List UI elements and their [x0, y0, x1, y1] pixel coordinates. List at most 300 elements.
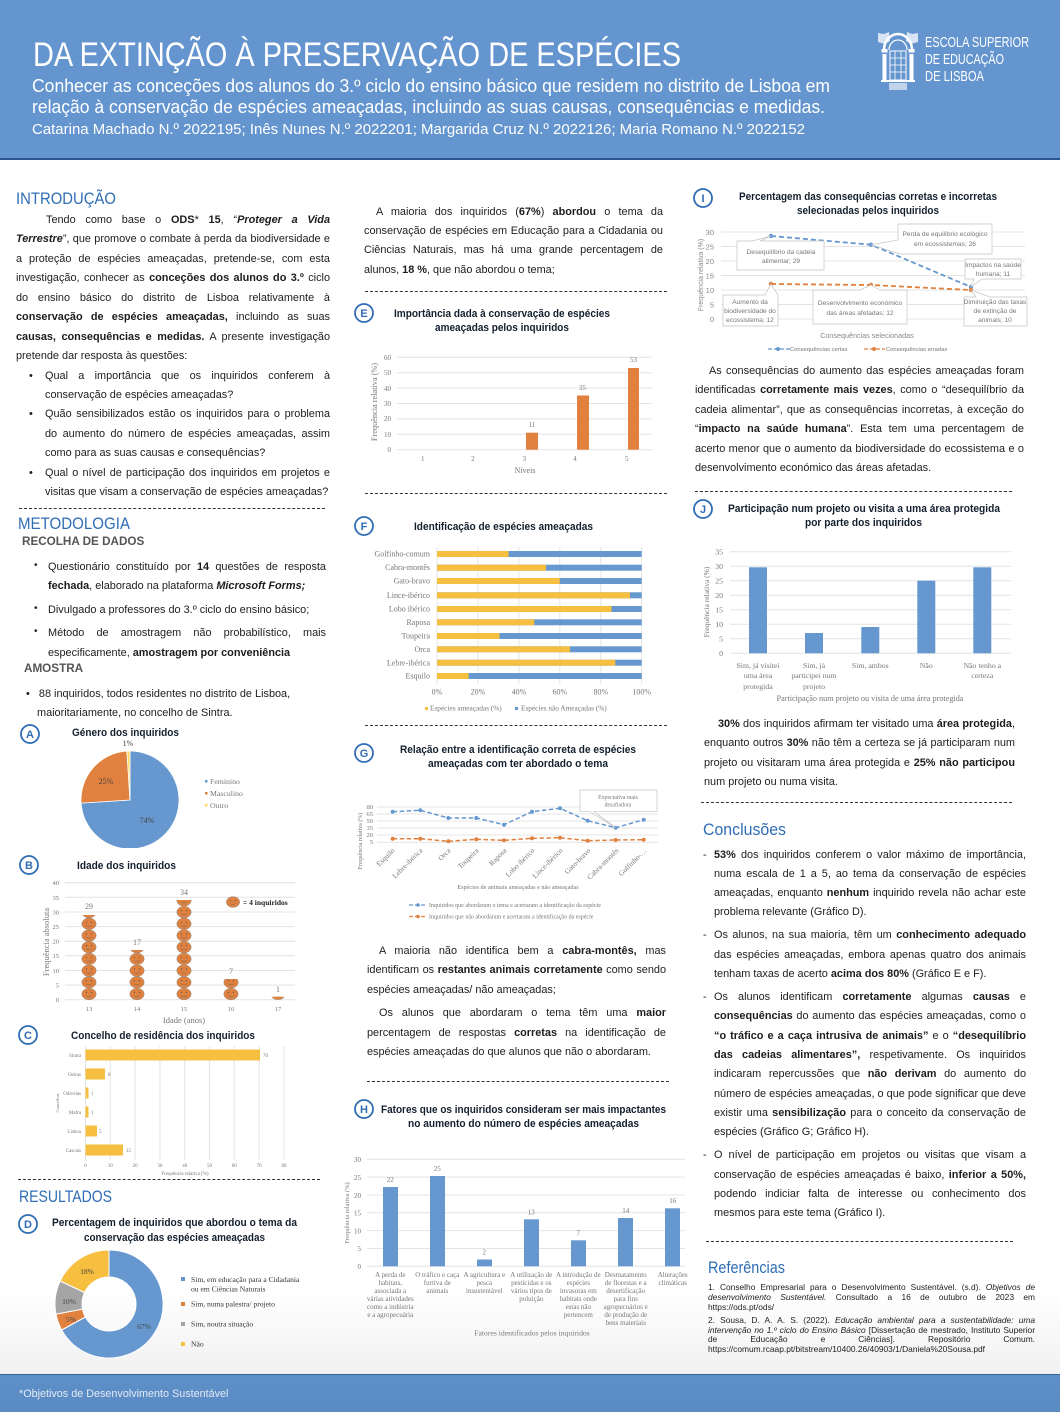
bar chart: participação: Sim, já visitei [736, 661, 780, 670]
pictogram chart: idade: 40 [52, 880, 59, 887]
legend: género: Feminino [210, 777, 240, 786]
bar chart: importância: 50 [384, 369, 392, 377]
pictogram chart: idade: 0 [56, 997, 59, 1004]
pictogram chart: idade: 15 [181, 1006, 187, 1013]
bar chart: concelho: Sintra [69, 1054, 82, 1059]
list: conclusões: espécies (Gráfico G; Gráfico H). [714, 1126, 869, 1138]
text: consequências [695, 365, 1024, 474]
panel: C concelho [18, 1025, 287, 1177]
list: conclusões: podendo indiciar falta de interesse ou conhecimento dos [714, 1188, 1026, 1200]
line chart: Espécies de animais ameaçadas e não ameaçadas [457, 884, 579, 891]
badge D [19, 1215, 37, 1233]
header banner [0, 0, 1060, 160]
bar chart: fatores: A introdução de [556, 1271, 601, 1279]
legend: consequências [768, 347, 947, 353]
bar chart: participação: Participação num projeto ou visita de uma área protegida [777, 694, 964, 703]
text: participação [704, 718, 1015, 788]
heading: referências: Referências [708, 1258, 785, 1277]
text: identificação de espécies: espécies ameaçadas do que alunos que não o abordaram. [367, 1046, 651, 1058]
icon: school logo window [878, 32, 918, 90]
text: introdução: conservação de espécies ameaçadas? [45, 389, 233, 401]
pictogram chart: idade: 16 [228, 1006, 235, 1013]
pictogram chart: idade: 7 [229, 967, 233, 976]
legend: donut [181, 1275, 300, 1348]
bar chart: concelho: Mafra [69, 1111, 82, 1116]
bar chart: fatores: pertencem [564, 1311, 593, 1319]
list: conclusões: “o tráfico e a caça intrusiva de animais” e o “desequilíbrio [714, 1030, 1026, 1042]
bar chart: importância: 2 [471, 455, 475, 463]
callout: expectativa: Expectativa mais [598, 795, 639, 801]
bar chart: importância: 11 [529, 421, 536, 429]
list: conclusões: - [703, 929, 707, 941]
bar chart: participação: Não tenho a [963, 661, 1002, 670]
text: consequências: desenvolvimento económico das áreas afetadas. [695, 462, 931, 474]
text: introdução: Qual o nível de participação dos inquiridos em projetos e [45, 467, 330, 479]
bar chart: participação: Sim, ambos [852, 661, 889, 670]
line chart: Lince-ibérico [530, 846, 565, 880]
bar chart: fatores: 13 [528, 1208, 535, 1216]
text: identificação de espécies [367, 945, 666, 1058]
authors: Catarina Machado N.º 2022195; Inês Nunes N.º 2022201; Margarida Cruz N.º 2022126; Maria Romano N.º 2022152 [32, 121, 805, 138]
pictogram chart: idade: 10 [52, 968, 59, 975]
bar chart: fatores: pesticidas e os [511, 1279, 552, 1287]
bar chart: fatores: e a agropecuária [367, 1311, 414, 1319]
line chart: 80 [366, 804, 373, 811]
callout labels: animais; 10 [978, 317, 1012, 324]
text: amostra [26, 688, 290, 719]
badge I [694, 189, 712, 207]
line chart: Gato-bravo [563, 846, 593, 876]
line chart: 50 [366, 818, 373, 825]
text: referências: intervenção no 1.º ciclo do Ensino Básico [Dissertação de mestrado, Instituto Superior [708, 1325, 1035, 1335]
panel: B idade [19, 855, 295, 1025]
line chart: 65 [366, 811, 373, 818]
bar chart: fatores: 22 [387, 1176, 394, 1184]
badge G [355, 744, 373, 762]
list: conclusões: conservação de espécies ameaçadas é baixo, inferior a 50%, [714, 1169, 1026, 1181]
bar chart: participação: Não [920, 661, 933, 670]
bar chart: fatores: insustentável [466, 1287, 503, 1295]
heading D [52, 1217, 298, 1244]
callout labels: alimentar; 29 [762, 258, 800, 265]
bar chart: fatores: várias atividades [367, 1295, 414, 1303]
text: referências [708, 1282, 1035, 1354]
bar chart: concelho: Oeiras [68, 1073, 81, 1078]
bar chart: concelho: 15 [126, 1149, 132, 1154]
bar chart: participação: protegida [743, 682, 773, 691]
bar chart: fatores: 30 [354, 1156, 362, 1164]
bar chart: participação: 25 [715, 576, 723, 586]
heading G: Relação entre a identificação correta de espécies [400, 744, 636, 756]
callout labels: Desenvolvimento económico [818, 300, 902, 307]
bar chart: concelho: 10 [108, 1164, 113, 1169]
stacked bar chart [374, 547, 651, 696]
heading G [400, 744, 636, 770]
line chart: Cabra-montês [585, 846, 621, 881]
callout labels: em ecossistemas; 26 [914, 241, 976, 248]
pie chart: género [81, 739, 179, 849]
stacked bar chart: Golfinho-comum [374, 550, 431, 558]
bar chart: importância: 35 [579, 384, 586, 392]
bar chart: fatores: A perda de [375, 1271, 405, 1279]
heading: conclusões: Conclusões [703, 820, 786, 839]
pictogram chart: idade: 14 [134, 1006, 141, 1013]
pictogram chart: idade: 15 [52, 953, 59, 960]
legend: line chart: Inquiridos que não abordaram e acertaram a identificação da espécie [429, 914, 594, 920]
bar chart: concelho: Cascais [66, 1149, 81, 1154]
bar chart: fatores: furtiva de [424, 1279, 451, 1287]
bar chart: fatores: de produção de [604, 1311, 647, 1319]
callout labels: das áreas afetadas; 12 [826, 310, 894, 317]
heading D: conservação das espécies ameaçadas [84, 1232, 265, 1244]
text: participação: projeto ou visitaram uma área protegida e 25% não participou [704, 757, 1015, 769]
heading J: por parte dos inquiridos [805, 517, 922, 529]
bar chart: fatores: Alterações [658, 1271, 688, 1279]
stacked bar chart: 20% [471, 688, 486, 696]
text: amostra: • 88 inquiridos, todos residentes no distrito de Lisboa, [26, 688, 290, 700]
bar chart: concelho: Frequência relativa (%) [161, 1172, 209, 1177]
bar chart: fatores: agropecuários e [604, 1303, 648, 1311]
bar chart: participação: participei num [791, 671, 837, 680]
title: DA EXTINÇÃO À PRESERVAÇÃO DE ESPÉCIES [33, 36, 681, 74]
text: introdução: como para as suas causas e consequências? [45, 447, 265, 459]
list: conclusões: Os alunos identificam corretamente algumas causas e [714, 991, 1026, 1003]
badge E [355, 304, 373, 322]
bar chart: concelho: 20 [133, 1164, 138, 1169]
heading F: Identificação de espécies ameaçadas [414, 521, 593, 533]
subtitle [32, 76, 830, 117]
callouts: consequências [723, 224, 1027, 326]
text: introdução: conservação de espécies ameaçadas, incluindo as suas [16, 311, 330, 323]
text: introdução: Terrestre”, que promove o combate à perda da biodiversidade e [16, 233, 330, 245]
bar chart: fatores: de florestas e a [605, 1279, 647, 1287]
legend: donut: Sim, em educação para a Cidadania [191, 1275, 300, 1284]
list: conclusões: indicaram repercussões que não derivam do aumento do [714, 1068, 1026, 1080]
list: conclusões: numa escala de 1 a 5, ao tema da conservação de espécies [714, 868, 1026, 880]
callout labels: Perda de equilíbrio ecológico [902, 231, 988, 238]
text: identificação de espécies: Os alunos que abordaram o tema têm uma maior [379, 1007, 666, 1019]
legend: donut: Sim, noutra situação [191, 1320, 253, 1328]
bar chart: fatores: estas não [566, 1303, 592, 1311]
bar chart: fatores: 20 [354, 1192, 362, 1200]
subheading: recolha de dados: RECOLHA DE DADOS [22, 535, 144, 548]
legend: consequências: Consequências certas [790, 347, 847, 353]
legend: stacked bar [425, 704, 607, 712]
callout labels: ecossistema; 12 [726, 317, 774, 324]
stacked bar chart: 80% [593, 688, 608, 696]
donut chart: 67% [137, 1322, 151, 1331]
bar chart: fatores: 7 [577, 1230, 581, 1238]
callout labels: humana; 11 [976, 271, 1010, 278]
text: recolha de dados: fechada, elaborado na plataforma Microsoft Forms; [48, 580, 305, 592]
bar chart: fatores: 5 [358, 1245, 362, 1253]
bar chart: fatores: invasoras em [560, 1287, 597, 1295]
bar chart: fatores: poluição [519, 1295, 544, 1303]
bar chart: participação: uma área [744, 671, 773, 680]
pie chart: género: 1% [123, 739, 134, 748]
bar chart: fatores: habitats, [379, 1279, 402, 1287]
text: introdução: causas, consequências e medidas. A presente investigação [16, 331, 330, 343]
badge I: I [701, 193, 705, 205]
panel: G relação [354, 743, 658, 920]
text: referências: desenvolvimento Sustentável. Consultado a 16 de outubro de 2023 em [708, 1292, 1035, 1302]
subtitle: Conhecer as conceções dos alunos do 3.º ciclo do ensino básico que residem no distrito de Lisboa em [32, 76, 830, 96]
legend: stacked bar: Espécies ameaçadas (%) [430, 704, 502, 712]
line chart: Esquilo [374, 846, 397, 868]
list: conclusões: 53% dos inquiridos conferem o valor máximo de importância, [714, 848, 1026, 860]
legend: smiley = 4 inquiridos: = 4 inquiridos [243, 898, 288, 907]
donut chart: 18% [80, 1267, 94, 1276]
line chart: consequências: 30 [706, 228, 714, 237]
text: participação: num projeto ou numa visita. [704, 776, 838, 788]
text: referências: https://ods.pt/ods/ [708, 1302, 774, 1312]
bar chart: importância: 10 [384, 431, 392, 439]
bar chart: importância: 4 [573, 455, 577, 463]
bar chart: concelho: 40 [182, 1164, 188, 1169]
heading I [739, 191, 997, 217]
pictogram chart: idade: 13 [86, 1006, 92, 1013]
heading B: Idade dos inquiridos [77, 860, 176, 872]
pie chart: género: 74% [140, 816, 155, 825]
list: conclusões: ameaçadas, enquanto nenhum inquirido revela não achar este [714, 887, 1026, 899]
logo text: DE LISBOA [925, 68, 984, 85]
logo text [925, 34, 1029, 85]
text: identificação de espécies: espécies ameaçadas/ não ameaçadas; [367, 984, 556, 996]
subheading: amostra: AMOSTRA [24, 662, 83, 675]
heading H: Fatores que os inquiridos consideram ser mais impactantes [381, 1104, 666, 1116]
callout labels [724, 231, 1027, 324]
text: recolha de dados: Método de amostragem não probabilístico, mais [48, 627, 326, 639]
heading I: Percentagem das consequências corretas e incorretas [739, 191, 997, 203]
pictogram chart: idade: 30 [52, 910, 59, 916]
text: abordagem do tema: conservação de espécies em Educação para a Cidadania ou [364, 225, 663, 237]
badge F [355, 517, 373, 535]
bar chart: fatores: como a indústria [367, 1303, 415, 1311]
text: abordagem do tema: A maioria dos inquiridos (67%) abordou o tema da [376, 206, 663, 218]
line chart [357, 804, 658, 891]
text: amostra: maioritariamente, no concelho de Sintra. [37, 707, 233, 719]
pictogram chart: idade: Frequência absoluta [41, 908, 51, 976]
list: conclusões: das cadeias alimentares”, respetivamente. Os inquiridos [714, 1049, 1026, 1061]
bullets: recolha de dados: • [34, 560, 38, 571]
stacked bar chart: Toupeira [402, 632, 430, 640]
bar chart: participação: 15 [715, 606, 723, 614]
bullets: recolha de dados: • [34, 603, 38, 614]
text: introdução: Tendo como base o ODS* 15, “Proteger a Vida [46, 214, 330, 226]
bar chart: fatores: espécies [567, 1279, 590, 1287]
text: consequências: “impacto na saúde humana”. Esta tem uma percentagem de [695, 423, 1024, 435]
bar chart: fatores: bens materiais [606, 1319, 646, 1327]
list: conclusões: Os alunos, na sua maioria, têm um conhecimento adequado [714, 929, 1026, 941]
line chart: consequências [698, 228, 1025, 340]
badge A [21, 725, 39, 743]
line chart: Orca [436, 846, 453, 862]
heading H: no aumento do número de espécies ameaçadas [408, 1118, 639, 1130]
legend: género [205, 777, 243, 810]
badge H: H [360, 1104, 368, 1116]
bar chart: fatores [344, 1156, 688, 1338]
bar chart: fatores: A utilização de [510, 1271, 552, 1279]
text: introdução: pretende dar resposta às questões: [16, 350, 187, 362]
list: conclusões: existir uma sensibilização para o conceito da conservação de [714, 1107, 1026, 1119]
bar chart: importância: 1 [421, 455, 425, 463]
text: referências: 2. Sousa, D. A. A. S. (2022). Educação ambiental para a sustentabilidade: uma [708, 1315, 1035, 1325]
panel: J participação [693, 499, 1011, 703]
bar chart: concelho: Odivelas [63, 1092, 81, 1097]
bar chart: concelho: 50 [207, 1164, 212, 1169]
list: conclusões: - [703, 1149, 707, 1161]
text: participação: 30% dos inquiridos afirmam ter visitado uma área protegida, [718, 718, 1015, 730]
stacked bar chart: 40% [512, 688, 527, 696]
text: abordagem do tema [364, 206, 664, 276]
heading I: selecionadas pelos inquiridos [797, 205, 939, 217]
pie chart: género: 25% [99, 777, 114, 786]
heading E [394, 308, 610, 334]
bar chart: concelho: 80 [282, 1164, 287, 1169]
bar chart: importância: 3 [523, 455, 527, 463]
bar chart: fatores: Frequência relativa (%) [344, 1182, 351, 1244]
pictogram chart: idade: Idade (anos) [163, 1015, 205, 1025]
text: consequências: identificadas corretamente mais vezes, como o “desequilíbrio da [695, 384, 1024, 396]
text: consequências: acerto menor que o aumento da biodiversidade do ecossistema e o [695, 443, 1024, 455]
bar chart: participação: 35 [715, 548, 723, 556]
callout: expectativa: desafiadora [605, 802, 632, 808]
badge F: F [361, 521, 368, 533]
text: introdução: Qual a importância que os inquiridos conferem à [45, 370, 330, 382]
legend: consequências: Consequências erradas [886, 347, 947, 353]
heading J [728, 503, 1001, 529]
line chart: Raposa [487, 846, 509, 868]
list: conclusões: mesmos para este tema (Gráfico I). [714, 1207, 885, 1219]
text: introdução: investigação, conhecer as conceções dos alunos do 3.º ciclo [16, 272, 330, 284]
panel: H fatores [344, 1099, 688, 1338]
badge J: J [700, 504, 706, 516]
legend: smiley = 4 inquiridos [226, 897, 288, 907]
badge B: B [25, 860, 33, 872]
callout labels: de extinção de [974, 308, 1017, 315]
stacked bar chart: Cabra-montês [385, 563, 430, 572]
footnote: *Objetivos de Desenvolvimento Sustentável [19, 1388, 228, 1400]
badge D: D [24, 1219, 32, 1231]
bar chart: fatores: 10 [354, 1228, 362, 1236]
legend: donut: Não [191, 1340, 204, 1348]
heading D: Percentagem de inquiridos que abordou o tema da [52, 1217, 298, 1229]
list: conclusões: tenham taxas de acerto acima dos 80% (Gráfico E e F). [714, 968, 986, 980]
line chart: 5 [370, 839, 373, 846]
line chart: consequências: 20 [706, 257, 714, 266]
list: conclusões: - [703, 991, 707, 1003]
pictogram chart: idade: 17 [133, 938, 141, 947]
donut chart: 10% [62, 1297, 76, 1306]
donut chart [55, 1250, 163, 1358]
bar chart: importância: Frequência relativa (%) [370, 363, 379, 441]
pictogram chart: idade: 29 [85, 902, 93, 911]
bar chart: fatores: Fatores identificados pelos inquiridos [474, 1328, 590, 1338]
text: abordagem do tema: Ciências Naturais, mas há uma grande percentagem de [364, 244, 663, 256]
panel: A género [20, 724, 243, 848]
text: introdução [16, 214, 330, 498]
panel: E importância [354, 303, 652, 475]
bar chart: fatores: 25 [354, 1174, 362, 1182]
bar chart: participação [702, 548, 1011, 703]
bar chart: importância: Níveis [515, 466, 535, 475]
bar chart: fatores: 0 [358, 1263, 362, 1271]
heading E: ameaçadas pelos inquiridos [435, 322, 569, 334]
text: identificação de espécies: identificam os restantes animais corretamente como sendo [367, 964, 666, 976]
bar chart: fatores: pesca [477, 1279, 493, 1287]
list: conclusões [703, 848, 1026, 1219]
stacked bar chart: 100% [632, 688, 651, 696]
bar chart: participação: Frequência relativa (%) [702, 566, 711, 637]
stacked bar chart: 60% [552, 688, 567, 696]
bar chart: participação: 30 [715, 562, 723, 571]
text: recolha de dados: especificamente, amostragem por conveniência [48, 647, 290, 659]
panel: D abordou o tema [18, 1214, 300, 1358]
heading J: Participação num projeto ou visita a uma área protegida [728, 503, 1001, 515]
list: conclusões: número de espécies ameaçadas, o que pode significar que deve [714, 1088, 1026, 1100]
list: conclusões: consequências do aumento das espécies ameaçadas, como o [714, 1010, 1026, 1022]
bar chart: concelho: Concelhos [55, 1093, 60, 1112]
line chart: Frequência relativa (%) [357, 813, 364, 869]
legend: donut: ou em Ciências Naturais [191, 1284, 265, 1294]
badge H [355, 1100, 373, 1118]
line chart: Lobo ibérico [504, 846, 537, 879]
text: introdução: a proteção de espécies ameaçadas, pretende-se, com esta [16, 253, 330, 265]
bar chart: fatores: desertificação [606, 1287, 646, 1295]
bar chart: importância: 30 [384, 400, 392, 408]
bar chart: concelho: Lisboa [67, 1130, 82, 1135]
badge A: A [26, 729, 34, 741]
text: participação: enquanto outros 30% não têm a certeza se já participaram num [704, 737, 1015, 749]
stacked bar chart: Lebre-ibérica [387, 658, 430, 668]
stacked bar chart: Raposa [406, 618, 430, 627]
bar chart: importância: 40 [384, 385, 392, 393]
heading: introdução: INTRODUÇÃO [16, 189, 116, 208]
text: introdução: do ensino básico do distrito de Lisboa relativamente à [16, 292, 330, 304]
bar chart: participação: 20 [715, 591, 723, 600]
callout labels: Aumento da [732, 299, 768, 306]
heading: metodologia: METODOLOGIA [18, 514, 131, 533]
badge E: E [360, 308, 368, 320]
bar chart: fatores: associada a [374, 1287, 407, 1295]
badge J [694, 500, 712, 518]
pictogram chart: idade: 1 [276, 985, 280, 994]
pictogram chart: idade [41, 880, 295, 1025]
legend: género: Masculino [210, 789, 243, 798]
text: recolha de dados: Questionário constituído por 14 questões de resposta [48, 560, 326, 572]
line chart: Toupeira [456, 846, 481, 871]
bar chart: fatores: 25 [434, 1165, 441, 1173]
list: conclusões: das espécies ameaçadas, embora apenas quatro dos animais [714, 949, 1026, 961]
bar chart: fatores: Desmatamento [605, 1271, 647, 1279]
legend: género: Outro [210, 801, 228, 810]
logo text: DE EDUCAÇÃO [925, 51, 1004, 68]
line chart: consequências: 25 [706, 242, 714, 252]
bar chart: concelho: 5 [99, 1130, 102, 1135]
pictogram chart: idade: 34 [180, 888, 188, 897]
callout labels: biodiversidade do [724, 308, 776, 315]
bar chart: concelho: 0 [84, 1164, 87, 1169]
pictogram chart: idade: 17 [275, 1006, 282, 1013]
text: recolha de dados [48, 560, 326, 659]
pictogram chart: idade: 5 [56, 982, 59, 990]
bar chart: participação: 10 [715, 620, 723, 629]
bar chart: fatores: 2 [483, 1248, 487, 1256]
text: identificação de espécies: percentagem de respostas corretas na identificação de [367, 1027, 666, 1039]
panel: I consequências [693, 188, 1028, 353]
bar chart: fatores: animais [426, 1287, 448, 1295]
line chart: consequências: 5 [710, 300, 714, 310]
